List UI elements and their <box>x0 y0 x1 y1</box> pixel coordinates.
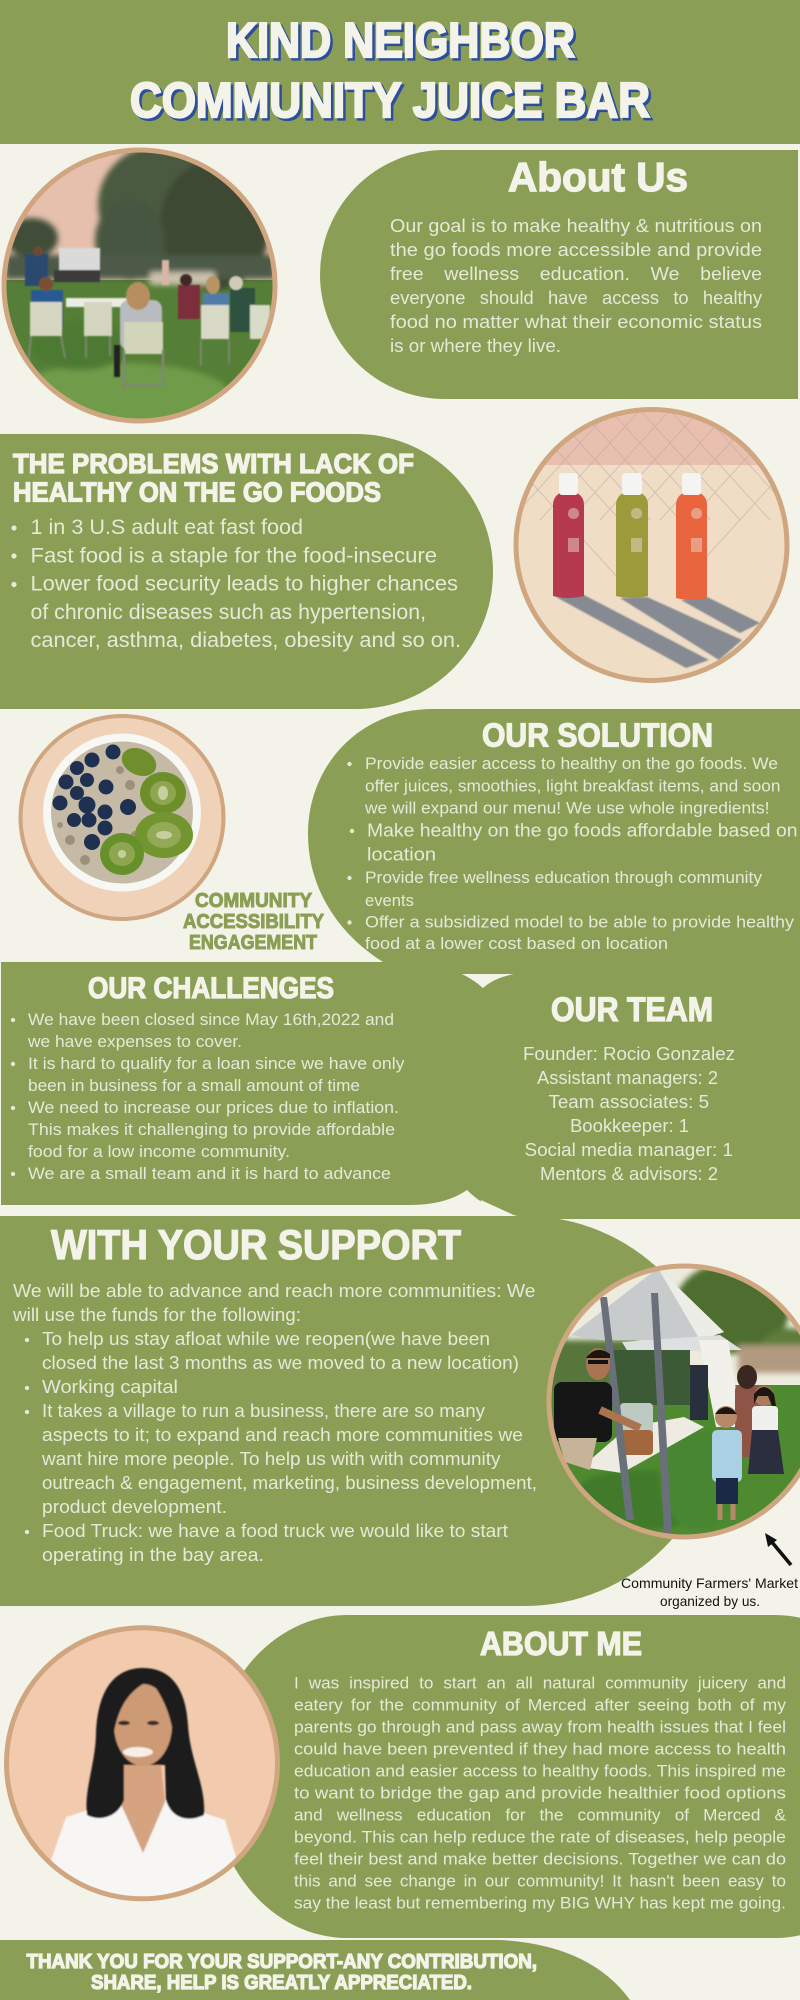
body text: about me: could have been prevented if they had more access to health <box>294 1740 786 1758</box>
body text: about us: everyone should have access to healthy <box>390 288 762 308</box>
photo: kiwi and blueberry bowl <box>20 716 224 920</box>
body text: support: To help us stay afloat while we reopen(we have been <box>42 1329 490 1349</box>
label: community accessibility engagement: COMMUNITY <box>195 890 313 912</box>
panel: our team <box>380 974 735 1216</box>
body text: about me: beyond. This can help reduce the rate of diseases, help people <box>294 1828 786 1846</box>
photo: portrait <box>0 1620 285 1910</box>
title: KIND NEIGHBOR <box>228 16 578 70</box>
heading: about us: About Us <box>508 154 688 200</box>
body text: about me: eatery for the community of Merced after seeing both of my <box>294 1696 787 1714</box>
thank you message: THANK YOU FOR YOUR SUPPORT-ANY CONTRIBUTION, <box>26 1950 537 1973</box>
bullet list: problems: of chronic diseases such as hypertension, <box>30 600 426 624</box>
bullet list: problems <box>11 515 461 652</box>
team list: Founder: Rocio Gonzalez <box>523 1044 735 1064</box>
bullet list: challenges: we have expenses to cover. <box>27 1033 242 1051</box>
body text: support: Food Truck: we have a food truck we would like to start <box>42 1521 508 1541</box>
bullet list: solution: Offer a subsidized model to be able to provide healthy <box>365 914 795 932</box>
panel: our challenges <box>1 962 481 1205</box>
bullet list: solution <box>347 755 798 953</box>
thank you message <box>26 1950 537 1994</box>
body text: support: will use the funds for the following: <box>12 1305 301 1325</box>
bullet list: solution: events <box>365 892 414 910</box>
bullet list: solution: we will expand our menu! We use whole ingredients! <box>364 800 770 818</box>
caption: community farmers market: Community Farmers' Market <box>621 1575 798 1591</box>
panel: the problems <box>0 434 493 709</box>
label: community accessibility engagement: ACCESSIBILITY <box>183 911 325 933</box>
caption: community farmers market <box>621 1575 798 1609</box>
body text: support: operating in the bay area. <box>42 1545 264 1565</box>
bullet list: solution: Provide free wellness education through community <box>365 869 763 887</box>
thank you message: SHARE, HELP IS GREATLY APPRECIATED. <box>91 1971 472 1994</box>
body text: support: product development. <box>42 1497 227 1517</box>
heading: our challenges: OUR CHALLENGES <box>88 972 334 1005</box>
body text: about us: Our goal is to make healthy & nutritious on <box>390 216 762 236</box>
photo: farmers market booth <box>545 1262 800 1545</box>
body text: support: outreach & engagement, marketing, business development, <box>42 1473 537 1493</box>
heading: about me: ABOUT ME <box>480 1625 642 1662</box>
panel: about me <box>211 1615 800 1938</box>
body text: about me: to want to bridge the gap and provide healthier food options <box>294 1784 786 1802</box>
body text: about me: parents go through and pass away from health issues that I feel <box>294 1718 786 1736</box>
heading: the problems <box>13 448 414 508</box>
photo: three juice bottles <box>510 405 795 690</box>
bullet list: problems: Lower food security leads to higher chances <box>30 572 458 596</box>
body text: about me: I was inspired to start an all natural community juicery and <box>294 1674 786 1692</box>
bullet list: solution: Provide easier access to healthy on the go foods. We <box>365 755 778 773</box>
body text: about us: free wellness education. We believe <box>390 264 762 284</box>
heading: our solution: OUR SOLUTION <box>482 716 713 754</box>
title <box>130 14 652 130</box>
body text: support: We will be able to advance and reach more communities: We <box>13 1281 536 1301</box>
title: COMMUNITY JUICE BAR <box>132 76 652 130</box>
body text: about me: feel their best and make better decisions. Together we can do <box>294 1850 786 1868</box>
bullet list: solution: offer juices, smoothies, light breakfast items, and soon <box>365 778 780 796</box>
arrow <box>765 1533 791 1565</box>
body text: about me: this and see change in our community! It hasn't been easy to <box>294 1872 786 1890</box>
team list: Bookkeeper: 1 <box>570 1116 689 1136</box>
title: KIND NEIGHBOR <box>226 14 575 68</box>
body text: about us: the go foods more accessible and provide <box>390 240 762 260</box>
panel: about us <box>320 150 798 399</box>
team list: Team associates: 5 <box>548 1092 709 1112</box>
bullet list: challenges: We need to increase our prices due to inflation. <box>28 1099 399 1117</box>
body text: about us: food no matter what their economic status <box>390 312 762 332</box>
team list: Assistant managers: 2 <box>537 1068 718 1088</box>
bullet list: solution: Make healthy on the go foods affordable based on <box>367 820 798 840</box>
body text: support: closed the last 3 months as we moved to a new location) <box>42 1353 519 1373</box>
team list: Mentors & advisors: 2 <box>540 1164 718 1184</box>
bullet list: challenges <box>11 1011 405 1183</box>
bullet list: problems: cancer, asthma, diabetes, obesity and so on. <box>30 628 461 652</box>
body text: support: It takes a village to run a business, there are so many <box>42 1401 485 1421</box>
body text: about me: and wellness education for the community of Merced & <box>294 1806 786 1824</box>
bullet list: solution: food at a lower cost based on location <box>365 935 668 953</box>
heading: the problems: THE PROBLEMS WITH LACK OF <box>13 448 414 479</box>
label: community accessibility engagement <box>183 890 325 954</box>
bullet list: challenges: It is hard to qualify for a loan since we have only <box>28 1055 405 1073</box>
bullet list: problems: 1 in 3 U.S adult eat fast food <box>30 515 303 539</box>
heading: the problems: HEALTHY ON THE GO FOODS <box>13 476 381 508</box>
caption: community farmers market: organized by us. <box>660 1593 760 1609</box>
photo: community meeting in a park <box>0 145 280 427</box>
label: community accessibility engagement: ENGAGEMENT <box>189 932 317 954</box>
heading: our team: OUR TEAM <box>551 991 713 1029</box>
panel: thank you <box>0 1940 630 2000</box>
body text: support: want hire more people. To help us with with community <box>41 1449 501 1469</box>
body text: about me <box>294 1674 787 1912</box>
bullet list: challenges: been in business for a small amount of time <box>28 1077 360 1095</box>
body text: support: Working capital <box>42 1377 178 1397</box>
body text: about me: say the least but remembering my BIG WHY has kept me going. <box>294 1894 786 1912</box>
title banner <box>0 0 800 144</box>
heading: with your support: WITH YOUR SUPPORT <box>51 1221 461 1268</box>
body text: about us <box>390 216 762 356</box>
team list <box>523 1044 735 1184</box>
bullet list: problems: Fast food is a staple for the food-insecure <box>30 544 437 568</box>
bullet list: challenges: We are a small team and it is hard to advance <box>28 1165 391 1183</box>
bullet list: challenges: We have been closed since May 16th,2022 and <box>28 1011 394 1029</box>
title: COMMUNITY JUICE BAR <box>130 74 650 128</box>
panel: with your support <box>0 1216 720 1606</box>
bullet list: challenges: This makes it challenging to provide affordable <box>28 1121 395 1139</box>
panel: our solution <box>308 709 800 1219</box>
bullet list: solution: location <box>367 844 436 864</box>
body text: support: aspects to it; to expand and reach more communities we <box>42 1425 523 1445</box>
body text: support <box>12 1281 537 1565</box>
body text: about me: education and easier access to healthy foods. This inspired me <box>294 1762 786 1780</box>
bullet list: challenges: food for a low income community. <box>28 1143 290 1161</box>
team list: Social media manager: 1 <box>524 1140 733 1160</box>
body text: about us: is or where they live. <box>390 336 561 356</box>
